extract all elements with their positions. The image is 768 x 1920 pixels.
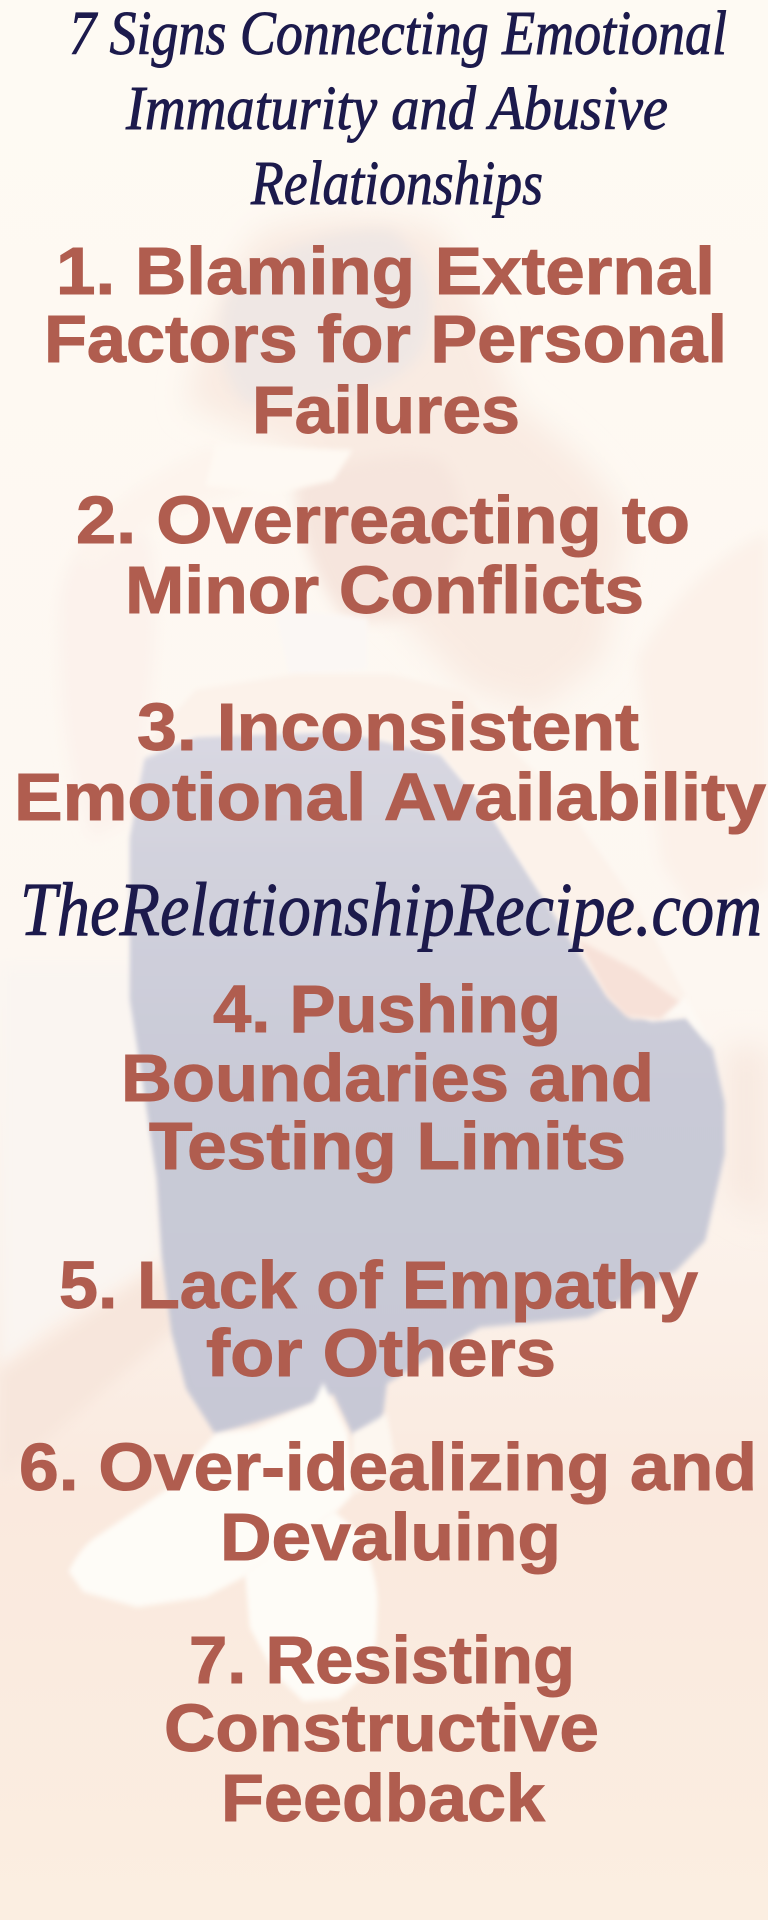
sign 7: 7. Resisting bbox=[189, 1623, 575, 1698]
jeans bbox=[130, 731, 725, 1435]
sign 1: Factors for Personal bbox=[44, 302, 727, 377]
sign 5: 5. Lack of Empathy bbox=[59, 1248, 698, 1323]
sign 3 bbox=[14, 690, 766, 835]
forearm to raised hand bbox=[73, 445, 255, 567]
raised hand bbox=[206, 445, 353, 493]
sign 7 bbox=[164, 1623, 599, 1836]
sign 6: 6. Over-idealizing and bbox=[19, 1430, 757, 1505]
sign 7: Constructive bbox=[164, 1691, 599, 1766]
sign 1: Failures bbox=[252, 373, 520, 448]
sign 2 bbox=[76, 483, 690, 628]
hair bbox=[186, 218, 627, 710]
sign 1 bbox=[44, 234, 727, 448]
sock: back foot bbox=[353, 1413, 394, 1495]
sign 6: Devaluing bbox=[220, 1500, 561, 1575]
sock: right foot bbox=[245, 1510, 378, 1702]
sign 4 bbox=[121, 972, 654, 1184]
sign 6 bbox=[19, 1430, 757, 1575]
sign 7: Feedback bbox=[221, 1761, 546, 1836]
sign 2: 2. Overreacting to bbox=[76, 483, 690, 558]
face in shadow bbox=[294, 455, 462, 621]
title: Immaturity and Abusive bbox=[125, 75, 668, 143]
sign 5 bbox=[59, 1248, 698, 1391]
sign 1: 1. Blaming External bbox=[56, 234, 715, 309]
sign 2: Minor Conflicts bbox=[125, 553, 644, 628]
floor and wall junction at right bbox=[725, 1047, 768, 1220]
sign 3: Emotional Availability bbox=[14, 760, 766, 835]
elbow bbox=[578, 940, 686, 1019]
skirting board bbox=[0, 1264, 176, 1481]
forearm across knees bbox=[142, 674, 686, 1019]
right shoulder and upper arm bbox=[637, 532, 768, 914]
sign 4: Testing Limits bbox=[149, 1109, 626, 1184]
left arm bbox=[59, 528, 156, 838]
sign 5: for Others bbox=[206, 1316, 556, 1391]
title: Relationships bbox=[250, 150, 543, 218]
shirt edge below elbow bbox=[661, 996, 713, 1048]
white top at chest bbox=[274, 608, 367, 674]
sign 4: Boundaries and bbox=[121, 1041, 654, 1116]
sign 3: 3. Inconsistent bbox=[137, 690, 639, 765]
sock: left foot bbox=[69, 1383, 353, 1607]
wall panel at left bbox=[0, 965, 162, 1366]
title bbox=[69, 0, 727, 218]
sign 4: 4. Pushing bbox=[213, 972, 561, 1047]
